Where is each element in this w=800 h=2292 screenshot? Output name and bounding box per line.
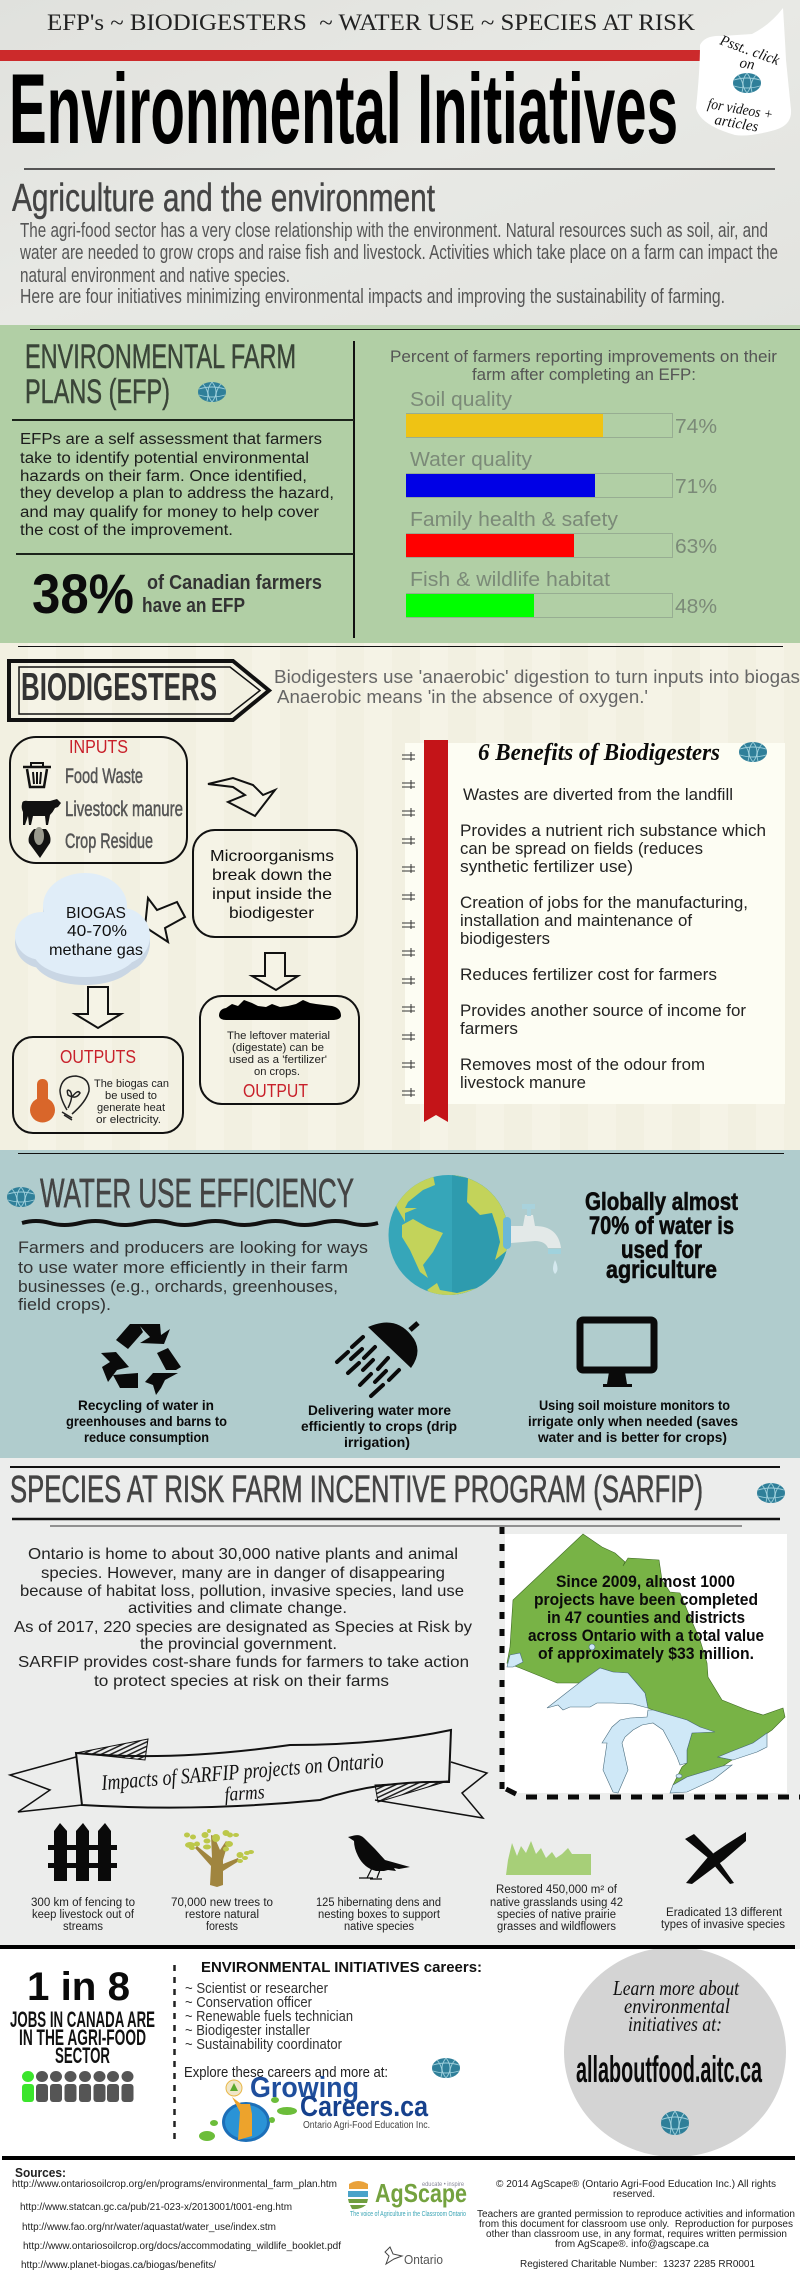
footer: copyright: Registered Charitable Number: 13237 2285 RR0001 [520, 2259, 755, 2270]
panel: environmental farm plans [0, 325, 800, 643]
caption: drip irrigation: irrigation) [344, 1434, 410, 1450]
footer: copyright: from AgScape®. info@agscape.ca [555, 2239, 709, 2250]
stat: 70 percent of water: Globally almost [585, 1188, 739, 1216]
footer: sources: Sources: [15, 2165, 66, 2180]
heading: water use efficiency: WATER USE EFFICIENCY [40, 1170, 354, 1216]
logo: AgScape [348, 2178, 467, 2218]
banner: impacts of SARFIP [10, 1730, 487, 1818]
heading: EFP: ENVIRONMENTAL FARM [25, 338, 296, 376]
circle: learn more: environmental [624, 1994, 730, 2018]
caption: dens and nesting boxes: 125 hibernating dens and [316, 1897, 441, 1909]
map caption: Since 2009, almost 1000 [556, 1572, 735, 1591]
heading: EFP [25, 338, 296, 411]
callout: speech bubble: on [738, 55, 756, 74]
icon: grass [506, 1841, 591, 1875]
cloud: biogas: 40-70% [67, 923, 127, 940]
water use text: Farmers and producers are looking for ways [18, 1238, 368, 1257]
icon: thermometer [30, 1079, 55, 1122]
icon: globe link [757, 1483, 785, 1503]
circle: learn more: initiatives at: [628, 2012, 722, 2036]
icon: corn [29, 827, 50, 858]
footer: sources: http://www.planet-biogas.ca/biogas/benefits/ [21, 2260, 216, 2271]
panel: careers and footer background [0, 1949, 800, 2292]
circle: learn more: Learn more about [612, 1976, 740, 2000]
bar chart: Water quality [410, 449, 532, 471]
careers heading: ENVIRONMENTAL INITIATIVES careers: [201, 1959, 482, 1976]
footer: copyright: © 2014 AgScape® (Ontario Agri-Food Education Inc.) All rights [496, 2179, 776, 2190]
footer: copyright: Teachers are granted permission to reproduce activities and information [477, 2209, 795, 2220]
box: microorganisms: break down the [212, 867, 332, 884]
stat: 38 percent: have an EFP [142, 595, 245, 617]
caption: fencing: keep livestock out of [32, 1909, 135, 1921]
footer: copyright: from this document for classroom use only. Reproduction for purposes [479, 2219, 793, 2230]
careers list: ~ Sustainability coordinator [185, 2037, 342, 2053]
caption: soil moisture monitors: water and is better for crops) [537, 1429, 727, 1445]
icon: recycle [101, 1324, 181, 1395]
biodigester definition [274, 667, 800, 707]
water use text: to use water more efficiently in their farm [18, 1258, 348, 1277]
SARFIP description: to protect species at risk on their farms [94, 1673, 389, 1690]
logo: AgScape: The voice of Agriculture in the Classroom Ontario [350, 2211, 466, 2218]
caption: drip irrigation: Delivering water more [308, 1402, 451, 1418]
icon: digestate pile [219, 1000, 341, 1020]
benefits list: installation and maintenance of [460, 911, 692, 930]
icon: shower head [337, 1322, 418, 1396]
benefits list: can be spread on fields (reduces [460, 839, 703, 858]
callout: speech bubble: for videos + [706, 96, 774, 123]
map caption: of approximately $33 million. [538, 1644, 754, 1663]
caption: trees [171, 1897, 273, 1933]
logo: Growing Careers: Careers.ca [300, 2091, 429, 2123]
footer: copyright: reserved. [613, 2189, 655, 2200]
footer: copyright: other than classroom use, in any format, requires written permission [486, 2229, 787, 2240]
icon: cow [22, 799, 61, 825]
caption: invasive species: types of invasive species [661, 1919, 785, 1931]
bar chart: Family health & safety [410, 509, 618, 531]
icon: bird [348, 1835, 410, 1879]
biodigester definition: Anaerobic means 'in the absence of oxygen.' [277, 687, 648, 707]
caption: dens and nesting boxes: nesting boxes to support [318, 1909, 441, 1921]
caption: recycling [66, 1397, 227, 1445]
box: outputs: generate heat [97, 1102, 165, 1114]
heading: biodigesters arrow tag: BIODIGESTERS [21, 666, 217, 709]
water use text: field crops). [18, 1295, 111, 1314]
careers list: ~ Conservation officer [185, 1995, 312, 2011]
box: microorganisms [193, 830, 357, 937]
stat: 1 in 8 jobs: JOBS IN CANADA ARE [10, 2007, 155, 2032]
panel: water use efficiency [0, 1150, 800, 1458]
icon: crossed blades [685, 1832, 746, 1884]
caption: trees: 70,000 new trees to [171, 1897, 273, 1909]
caption: recycling: greenhouses and barns to [66, 1413, 227, 1429]
red bar [0, 50, 703, 61]
box: microorganisms: Microorganisms [210, 848, 334, 865]
careers list [185, 1981, 353, 2053]
benefits list: Provides another source of income for [460, 1001, 746, 1020]
circle: learn more [564, 1947, 786, 2157]
cloud: biogas: methane gas [49, 942, 143, 959]
box: digestate output: (digestate) can be [232, 1042, 324, 1054]
footer: sources [12, 2165, 341, 2271]
SARFIP description: species. However, many are in danger of disappearing [41, 1565, 445, 1582]
arrow: microorganisms to digestate [252, 953, 298, 990]
bar chart [406, 389, 717, 618]
caption: invasive species: Eradicated 13 different [666, 1907, 783, 1919]
caption: grasslands: native grasslands using 42 [490, 1897, 623, 1909]
EFP description: and may qualify for money to help cover [20, 504, 319, 521]
banner: impacts of SARFIP: Impacts of SARFIP projects on Ontario [100, 1747, 384, 1795]
caption: fencing [31, 1897, 135, 1933]
EFP description: take to identify potential environmental [20, 450, 309, 467]
icon: monitor [580, 1320, 654, 1387]
stat: 70 percent of water: agriculture [606, 1256, 717, 1284]
stat: 38 percent: of Canadian farmers [147, 572, 322, 594]
panel: Ontario map [502, 1527, 800, 1797]
biodigester definition: Biodigesters use 'anaerobic' digestion to turn inputs into biogas [274, 667, 800, 687]
box: outputs: be used to [105, 1090, 157, 1102]
intro text: natural environment and native species. [20, 265, 290, 287]
benefits list: Provides a nutrient rich substance which [460, 821, 766, 840]
caption: grasslands: species of native prairie [497, 1909, 616, 1921]
benefits list: Creation of jobs for the manufacturing, [460, 893, 748, 912]
footer: sources: http://www.ontariosoilcrop.org/docs/accommodating_wildlife_booklet.pdf [23, 2241, 341, 2252]
map: Ontario [507, 1534, 785, 1793]
caption: drip irrigation [301, 1402, 457, 1450]
benefits list: Reduces fertilizer cost for farmers [460, 965, 717, 984]
bar chart: 74% [675, 416, 717, 438]
careers list: ~ Scientist or researcher [185, 1981, 328, 1997]
logo: Ontario [385, 2247, 443, 2267]
box: digestate output: OUTPUT [243, 1081, 308, 1101]
icon: globe link [432, 2058, 460, 2078]
caption: dens and nesting boxes: native species [344, 1921, 414, 1933]
box: inputs: Crop Residue [65, 830, 153, 853]
callout: speech bubble: Psst.. click [717, 32, 782, 69]
stat: 70 percent of water [585, 1188, 739, 1284]
caption: fencing: streams [63, 1921, 103, 1933]
box: inputs [10, 737, 187, 863]
EFP description: hazards on their farm. Once identified, [20, 468, 307, 485]
bar chart: 48% [675, 596, 717, 618]
box: microorganisms: input inside the [212, 886, 332, 903]
stat: 70 percent of water: 70% of water is [589, 1212, 734, 1240]
water use text: businesses (e.g., orchards, greenhouses, [18, 1277, 338, 1296]
banner: impacts of SARFIP: farms [224, 1781, 265, 1806]
caption: soil moisture monitors: irrigate only when needed (saves [528, 1413, 738, 1429]
logo: Growing Careers: Ontario Agri-Food Education Inc. [303, 2120, 430, 2131]
logo: AgScape: educate • inspire [422, 2182, 465, 2188]
caption: recycling: Recycling of water in [78, 1397, 214, 1413]
bar chart: Fish & wildlife habitat [410, 569, 610, 591]
EFP description [20, 431, 334, 539]
stat: 1 in 8 jobs: SECTOR [55, 2043, 110, 2068]
footer: sources: http://www.statcan.gc.ca/pub/21-023-x/2013001/t001-eng.htm [20, 2202, 292, 2213]
stat: 1 in 8 jobs [10, 1965, 155, 2102]
stat: 70 percent of water: used for [621, 1236, 702, 1264]
caption: drip irrigation: efficiently to crops (drip [301, 1418, 457, 1434]
EFP description: EFPs are a self assessment that farmers [20, 431, 322, 448]
caption: fencing: 300 km of fencing to [31, 1897, 135, 1909]
careers list: ~ Renewable fuels technician [185, 2009, 353, 2025]
icon: globe link [7, 1187, 35, 1207]
caption: trees: restore natural [185, 1909, 259, 1921]
box: digestate output: The leftover material [227, 1030, 330, 1042]
panel: species at risk [0, 1458, 800, 1949]
logo: Growing Careers [199, 2072, 430, 2142]
heading: biodigesters arrow tag [9, 661, 269, 720]
stat: 38 percent [32, 562, 322, 625]
caption: grasslands: Restored 450,000 m² of [496, 1884, 618, 1896]
logo: Ontario: Ontario [404, 2252, 443, 2267]
SARFIP description: SARFIP provides cost-share funds for farmers to take action [18, 1654, 469, 1671]
box: inputs: Livestock manure [65, 798, 183, 821]
logo: AgScape: AgScape [375, 2178, 467, 2208]
cloud: biogas [15, 873, 150, 985]
benefits list: synthetic fertilizer use) [460, 857, 633, 876]
box: outputs: OUTPUTS [60, 1047, 136, 1067]
SARFIP description [14, 1546, 472, 1690]
map caption: across Ontario with a total value [528, 1626, 764, 1645]
benefits list: Removes most of the odour from [460, 1055, 705, 1074]
stat: 1 in 8 jobs: IN THE AGRI-FOOD [19, 2025, 146, 2050]
heading: six benefits: 6 Benefits of Biodigesters [478, 740, 720, 766]
benefits list: livestock manure [460, 1073, 586, 1092]
footer: copyright [477, 2179, 795, 2270]
ribbon [424, 740, 448, 1122]
caption: soil moisture monitors [528, 1397, 738, 1445]
box: inputs: Food Waste [65, 765, 143, 788]
SARFIP description: Ontario is home to about 30,000 native plants and animal [28, 1546, 458, 1563]
bar chart: 71% [675, 476, 717, 498]
EFP description: they develop a plan to address the hazard, [20, 485, 334, 502]
chart title [390, 348, 778, 384]
panel: header background [0, 0, 800, 325]
stat: 1 in 8 jobs: 1 in 8 [27, 1965, 130, 2009]
map caption: in 47 counties and districts [547, 1608, 745, 1627]
icon: fence [48, 1823, 117, 1881]
box: outputs: The biogas can [94, 1078, 169, 1090]
icon: trash can [23, 763, 51, 787]
callout: speech bubble: articles [713, 112, 760, 136]
benefits list: biodigesters [460, 929, 550, 948]
people pictogram [22, 2071, 134, 2102]
caption: trees: forests [206, 1921, 238, 1933]
heading: EFP: PLANS (EFP) [25, 373, 170, 411]
icon: tree [184, 1829, 254, 1887]
cloud: biogas: BIOGAS [66, 905, 126, 922]
box: microorganisms: biodigester [229, 905, 315, 922]
icon: earth with tap [388, 1170, 561, 1300]
intro text [19, 220, 778, 308]
box: inputs: INPUTS [69, 737, 128, 757]
icon: globe link [198, 382, 226, 402]
SARFIP description: the provincial government. [140, 1636, 337, 1653]
arrow: biogas to outputs [75, 987, 121, 1028]
bar chart: Soil quality [410, 389, 512, 411]
SARFIP description: As of 2017, 220 species are designated as Species at Risk by [14, 1619, 472, 1636]
caption: grasslands: grasses and wildflowers [497, 1921, 616, 1933]
caption: recycling: reduce consumption [84, 1429, 209, 1445]
box: digestate output: on crops. [254, 1066, 300, 1078]
icon: globe link [739, 742, 767, 762]
icon: light bulb [60, 1076, 89, 1120]
heading: agriculture and the environment: Agriculture and the environment [12, 177, 435, 220]
stat: 38 percent: 38% [32, 562, 134, 625]
arrow: microorganisms to biogas [145, 898, 185, 942]
water use text [18, 1238, 368, 1314]
bar chart: 63% [675, 536, 717, 558]
box: outputs [13, 1037, 183, 1133]
box: outputs: or electricity. [96, 1114, 161, 1126]
logo: Growing Careers: Growing [250, 2072, 359, 2104]
benefits list: Wastes are diverted from the landfill [463, 785, 733, 804]
box: digestate output [200, 996, 359, 1104]
caption: invasive species [661, 1907, 785, 1931]
box: digestate output: used as a 'fertilizer' [229, 1054, 327, 1066]
benefits list: farmers [460, 1019, 518, 1038]
caption: soil moisture monitors: Using soil moisture monitors to [539, 1397, 730, 1413]
caption: grasslands [490, 1884, 623, 1933]
header topics line: EFP's ~ BIODIGESTERS ~ WATER USE ~ SPECIES AT RISK [47, 10, 695, 35]
caption: dens and nesting boxes [316, 1897, 441, 1933]
panel: biodigesters [0, 643, 800, 1150]
footer: sources: http://www.fao.org/nr/water/aquastat/water_use/index.stm [22, 2222, 276, 2233]
benefits list [460, 785, 766, 1092]
explore careers text: Explore these careers and more at: [184, 2065, 388, 2081]
SARFIP description: activities and climate change. [128, 1600, 347, 1617]
map caption: projects have been completed [534, 1590, 758, 1609]
chart title: farm after completing an EFP: [472, 366, 696, 384]
EFP description: the cost of the improvement. [20, 522, 233, 539]
arrow: curved inputs to microorganisms [208, 778, 275, 816]
panel: six benefits [402, 740, 785, 1122]
careers list: ~ Biodigester installer [185, 2023, 310, 2039]
chart title: Percent of farmers reporting improvements on their [390, 348, 778, 366]
callout: speech bubble [696, 8, 791, 136]
map caption [528, 1572, 764, 1663]
SARFIP description: because of habitat loss, pollution, invasive species, land use [20, 1583, 464, 1600]
footer: sources: http://www.ontariosoilcrop.org/en/programs/environmental_farm_plan.htm [12, 2179, 337, 2190]
